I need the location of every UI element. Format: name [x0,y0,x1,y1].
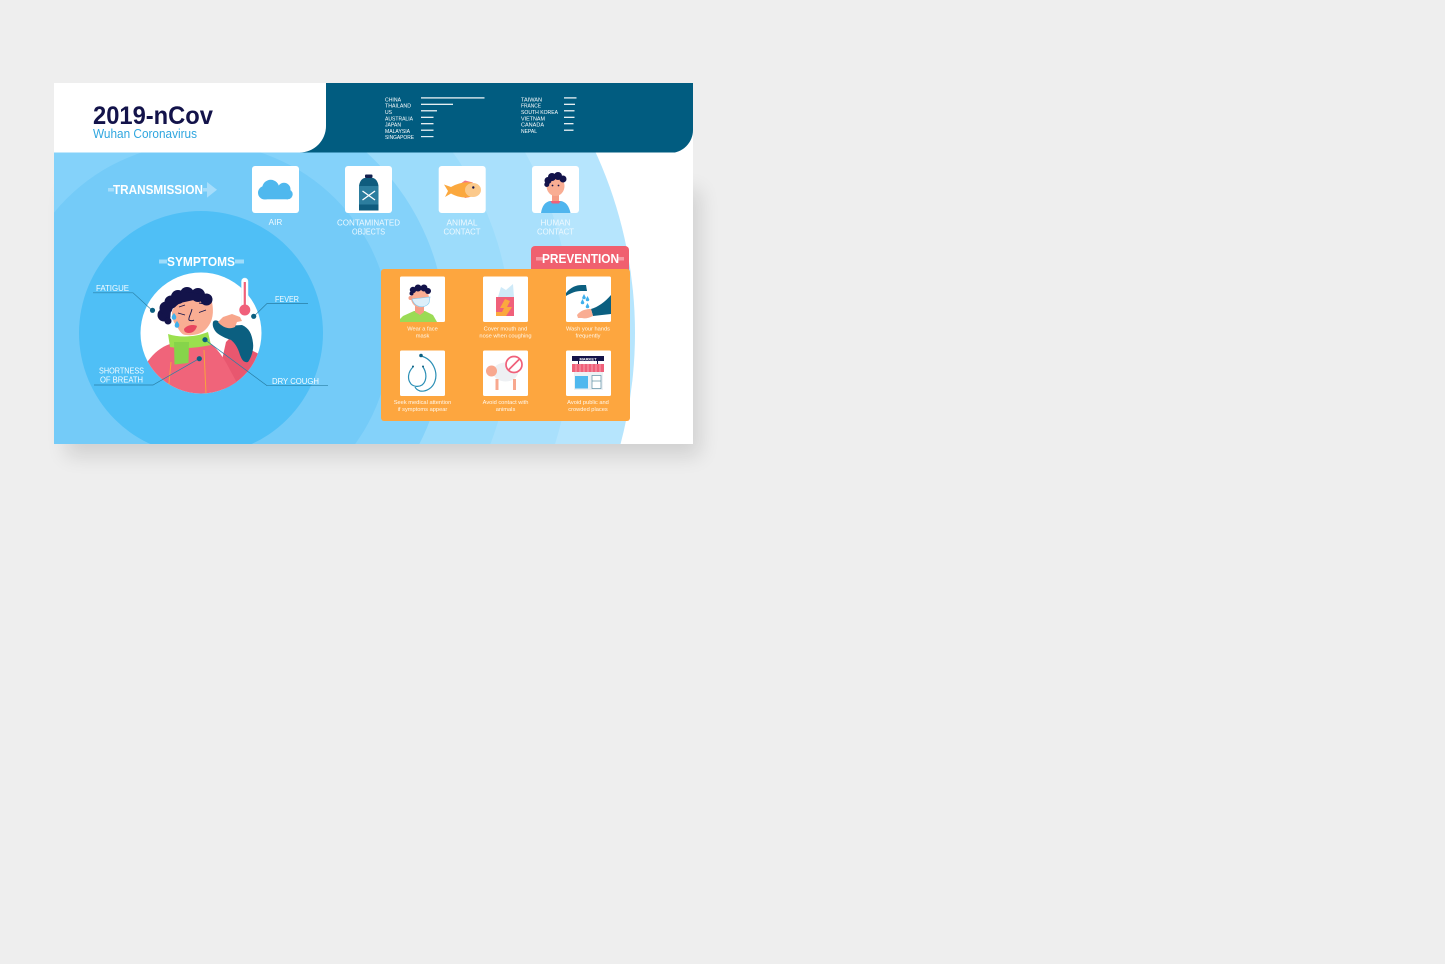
tile: seek medical attention: if symptoms appear [398,407,447,413]
subtitle: Wuhan Coronavirus [93,127,197,141]
label: air: AIR [269,218,282,227]
label: contaminated objects line 2: OBJECTS [352,228,385,236]
caption: Avoid contact with [483,400,528,406]
tile: wash your hands: frequently [576,334,601,340]
mouth [184,325,197,333]
infographic card [54,83,693,444]
tile: avoid public places: MARKET [579,356,597,361]
tears [172,313,176,320]
callout: fatigue: FATIGUE [96,284,130,293]
label: animal contact: ANIMAL [446,218,478,228]
transmission card: air [252,166,299,227]
concentric blue background rings [54,152,635,444]
case counts: left column bar chart: AUSTRALIA [385,116,414,122]
closed eyes, brows and nose [178,303,206,321]
case counts: left column bar chart: CHINA [385,98,402,104]
prevention heading tab: PREVENTION [542,252,619,266]
illustration: coughing person [140,272,262,394]
callout: shortness of breath: SHORTNESS [99,366,144,375]
hand [218,314,242,328]
icon: cloud [258,180,293,199]
transmission card: animal contact [439,166,486,228]
label: animal contact line 2: CONTACT [444,228,480,236]
case counts: left column bar chart [385,97,484,141]
case counts: left column bar chart: MALAYSIA [385,129,411,135]
callout: fatigue [93,284,155,313]
transmission card: human contact [532,166,579,228]
caption: Wear a face [407,326,438,332]
header band [54,83,693,153]
hair [158,287,212,324]
case counts: right column bar chart [521,97,576,135]
coat [148,343,236,394]
case counts: right column bar chart: CANADA [521,123,545,129]
case counts: right column bar chart: TAIWAN [521,98,542,104]
tile: seek medical attention [394,350,451,413]
title: 2019-nCov [93,102,213,130]
icon: person [541,172,570,213]
label: contaminated objects: CONTAMINATED [337,218,400,228]
callout: shortness of breath: OF BREATH [100,376,143,385]
callout: dry cough: DRY COUGH [272,377,319,386]
label: human contact: HUMAN [540,218,571,228]
case counts: right column bar chart: FRANCE [521,104,542,110]
tile: avoid public places [566,350,611,413]
callout: fever [251,295,308,319]
case counts: left column bar chart: US [385,110,393,116]
case counts: right column bar chart: VIETNAM [521,116,545,122]
thermometer [239,278,250,316]
tile: wear a face mask: mask [416,334,429,340]
tile: avoid public places: crowded places [568,407,608,413]
caption: Avoid public and [567,400,609,406]
case counts: right column bar chart: SOUTH KOREA [521,110,559,116]
caption: Seek medical attention [394,400,451,406]
head [172,299,213,335]
case counts: right column bar chart: NEPAL [521,129,537,135]
tile: avoid contact with animals: animals [496,407,515,413]
transmission heading with arrow: TRANSMISSION [113,183,203,197]
transmission card: contaminated objects [337,166,400,228]
case counts: left column bar chart: JAPAN [385,123,401,129]
callout: shortness of breath [94,356,202,385]
case counts: left column bar chart: THAILAND [385,104,411,110]
callout: dry cough [202,337,328,386]
tile: cover mouth and nose [479,276,532,340]
card shadow [66,190,700,456]
tissue cloth [213,320,253,362]
tile: avoid contact with animals [483,350,528,413]
prevention heading tab [531,246,629,272]
icon: fish [444,180,481,198]
right sleeve [222,339,258,389]
scarf [168,332,211,348]
case counts: left column bar chart: SINGAPORE [385,135,414,141]
panel: prevention [381,269,630,421]
caption: Wash your hands [566,326,610,332]
label: human contact line 2: CONTACT [537,228,574,236]
caption: Cover mouth and [484,326,527,332]
symptoms heading: SYMPTOMS [167,255,235,269]
tile: wash your hands [566,276,611,340]
symptoms heading [159,257,244,266]
tile: cover mouth and nose: nose when coughing [479,334,532,340]
tile: wear a face mask [400,276,445,340]
callout: fever: FEVER [275,295,299,304]
icon: bottle with crossbones [359,174,378,210]
